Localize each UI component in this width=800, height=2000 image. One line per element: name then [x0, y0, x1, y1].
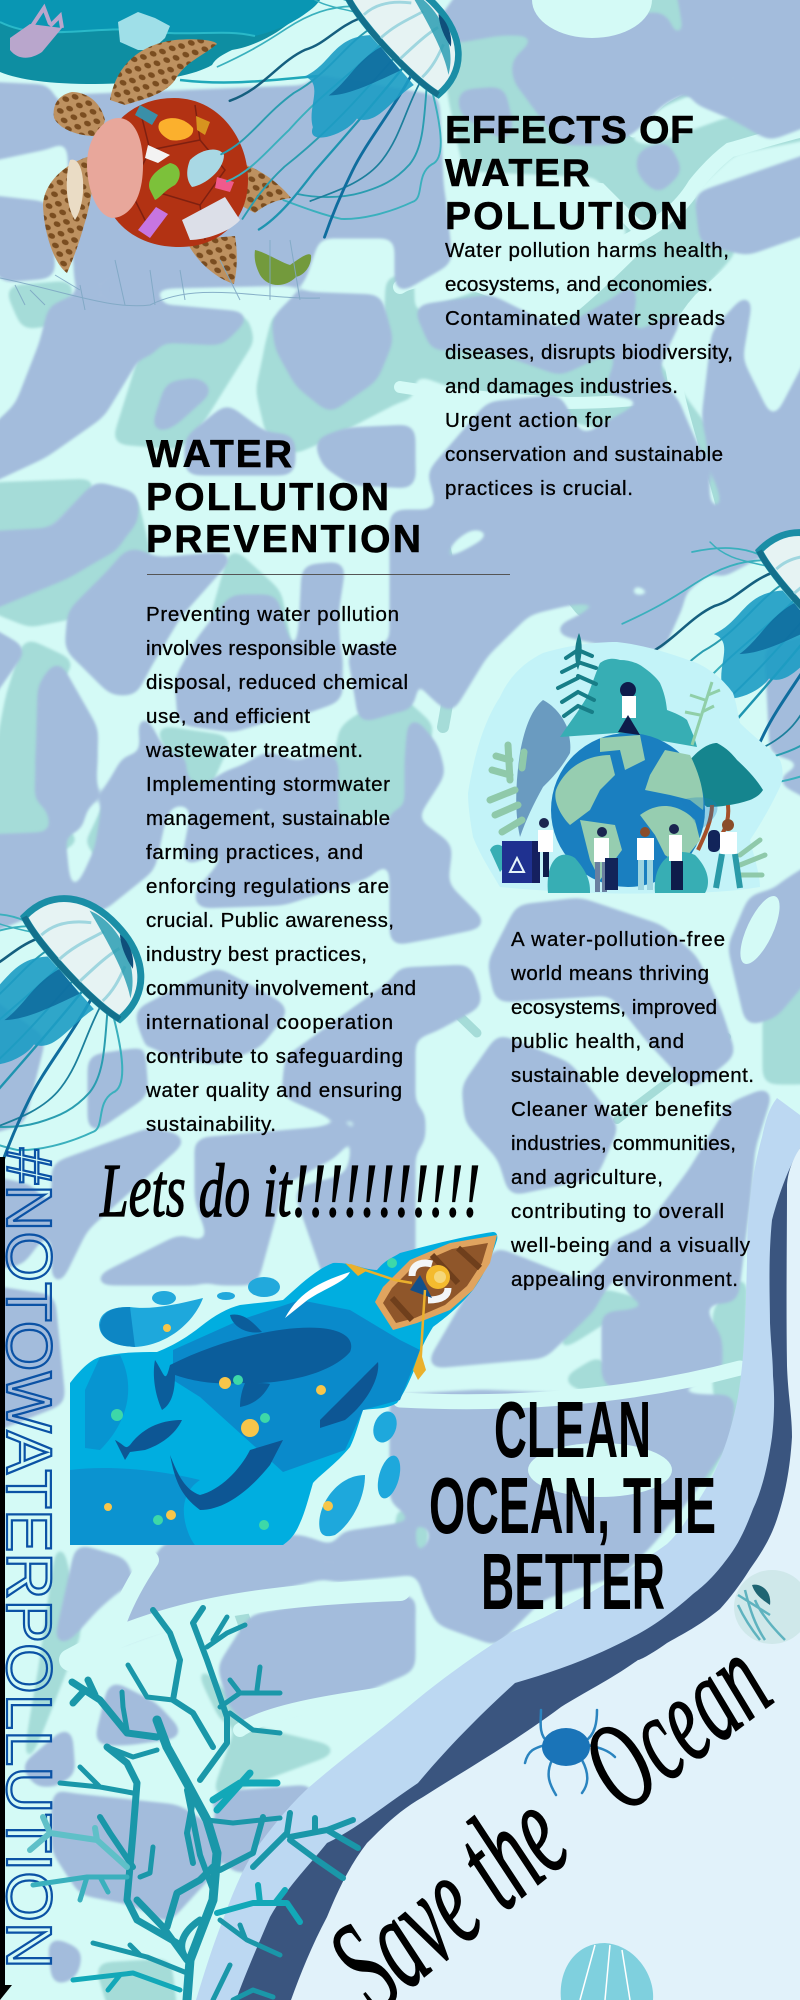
people figures — [538, 682, 740, 892]
text: benefits paragraph: Cleaner water benefits — [511, 1098, 732, 1121]
rowing boat — [345, 1235, 497, 1380]
text: benefits paragraph: A water-pollution-free — [511, 928, 725, 951]
illustration: boat and whales in blue water — [70, 1232, 497, 1545]
text: prevention paragraph: crucial. Public awareness, — [146, 909, 394, 932]
illustration: teal coral — [30, 1608, 358, 2000]
text: prevention paragraph: Preventing water pollution — [146, 603, 399, 626]
big statement: clean ocean, the better: BETTER — [481, 1537, 665, 1626]
text: prevention paragraph: sustainability. — [146, 1113, 276, 1136]
text: prevention paragraph: use, and efficient — [146, 705, 310, 728]
fishing net — [0, 240, 320, 310]
heading: effects of water pollution: POLLUTION — [445, 195, 688, 238]
lily pads — [104, 1324, 333, 1520]
heading: effects of water pollution: WATER — [445, 152, 590, 195]
heading: effects of water pollution — [445, 109, 694, 238]
text: benefits paragraph: contributing to overall — [511, 1200, 724, 1223]
whale small — [115, 1420, 182, 1460]
text: effects paragraph: ecosystems, and economies. — [445, 273, 713, 296]
text: benefits paragraph: sustainable development. — [511, 1064, 754, 1087]
heading: water pollution prevention — [146, 433, 421, 561]
illustration: sea turtle with plastic-filled shell — [0, 39, 320, 310]
whale large — [154, 1328, 351, 1410]
text: prevention paragraph: wastewater treatment. — [145, 739, 363, 762]
text: benefits paragraph — [510, 928, 754, 1291]
text: benefits paragraph: public health, and — [511, 1030, 684, 1053]
divider line — [147, 574, 510, 575]
illustration: jellyfish top — [152, 0, 524, 295]
text: benefits paragraph: appealing environment. — [511, 1268, 738, 1291]
heading: water pollution prevention: POLLUTION — [146, 476, 389, 519]
heading: water pollution prevention: PREVENTION — [146, 518, 421, 561]
text: benefits paragraph: and agriculture, — [511, 1166, 663, 1189]
text: effects paragraph: diseases, disrupts biodiversity, — [445, 341, 733, 364]
text: effects paragraph: Water pollution harms health, — [445, 239, 729, 262]
text: prevention paragraph: industry best practices, — [146, 943, 367, 966]
text: effects paragraph: and damages industries. — [445, 375, 678, 398]
text: prevention paragraph: water quality and ensuring — [145, 1079, 402, 1102]
big statement: clean ocean, the better: CLEAN — [494, 1385, 651, 1474]
text: prevention paragraph: disposal, reduced chemical — [146, 671, 408, 694]
icon: blue crab — [525, 1710, 615, 1795]
heading: effects of water pollution: EFFECTS OF — [445, 109, 694, 152]
pale spots on top — [532, 0, 652, 38]
text: benefits paragraph: ecosystems, improved — [511, 996, 717, 1019]
top polluted water wave — [0, 0, 320, 84]
text: prevention paragraph: involves responsible waste — [146, 637, 397, 660]
text: prevention paragraph — [145, 603, 416, 1136]
text: prevention paragraph: enforcing regulations are — [146, 875, 389, 898]
text: benefits paragraph: world means thriving — [510, 962, 709, 985]
script callout: lets do it: Lets do it!!!!!!!!!!! — [99, 1149, 480, 1233]
splash and droplets — [99, 1298, 203, 1347]
text: prevention paragraph: contribute to safeguarding — [146, 1045, 403, 1068]
icon: nautilus shell — [734, 1570, 800, 1644]
text: prevention paragraph: management, sustainable — [146, 807, 390, 830]
text: effects paragraph: Urgent action for — [445, 409, 611, 432]
illustration: jellyfish right — [553, 476, 800, 864]
heading: water pollution prevention: WATER — [146, 433, 292, 476]
decorative ocean wave swoosh panel — [196, 1098, 800, 2000]
text: effects paragraph: Contaminated water spreads — [445, 307, 725, 330]
icon: face mask — [255, 250, 311, 285]
icon: recycling bin — [502, 841, 540, 883]
text: benefits paragraph: industries, communities, — [511, 1132, 736, 1155]
icon: plastic bottle — [118, 12, 170, 50]
icon: scallop shell — [561, 1943, 653, 2000]
shark — [170, 1440, 283, 1510]
trash on shell — [87, 105, 240, 240]
big statement: clean ocean, the better — [429, 1385, 716, 1626]
icon: plastic bag — [10, 8, 62, 58]
text: effects paragraph: practices is crucial. — [445, 477, 633, 500]
illustration: jellyfish left — [0, 842, 209, 1230]
illustration: people cleaning the earth — [468, 633, 783, 894]
text: effects paragraph: conservation and sustainable — [445, 443, 723, 466]
pale veins over teal — [400, 62, 800, 520]
text: prevention paragraph: farming practices, and — [146, 841, 363, 864]
text: benefits paragraph: well-being and a visually — [510, 1234, 751, 1257]
text: prevention paragraph: community involvement, and — [146, 977, 416, 1000]
text: prevention paragraph: international cooperation — [146, 1011, 393, 1034]
text: effects paragraph — [445, 239, 733, 500]
text: prevention paragraph: Implementing stormwater — [146, 773, 390, 796]
